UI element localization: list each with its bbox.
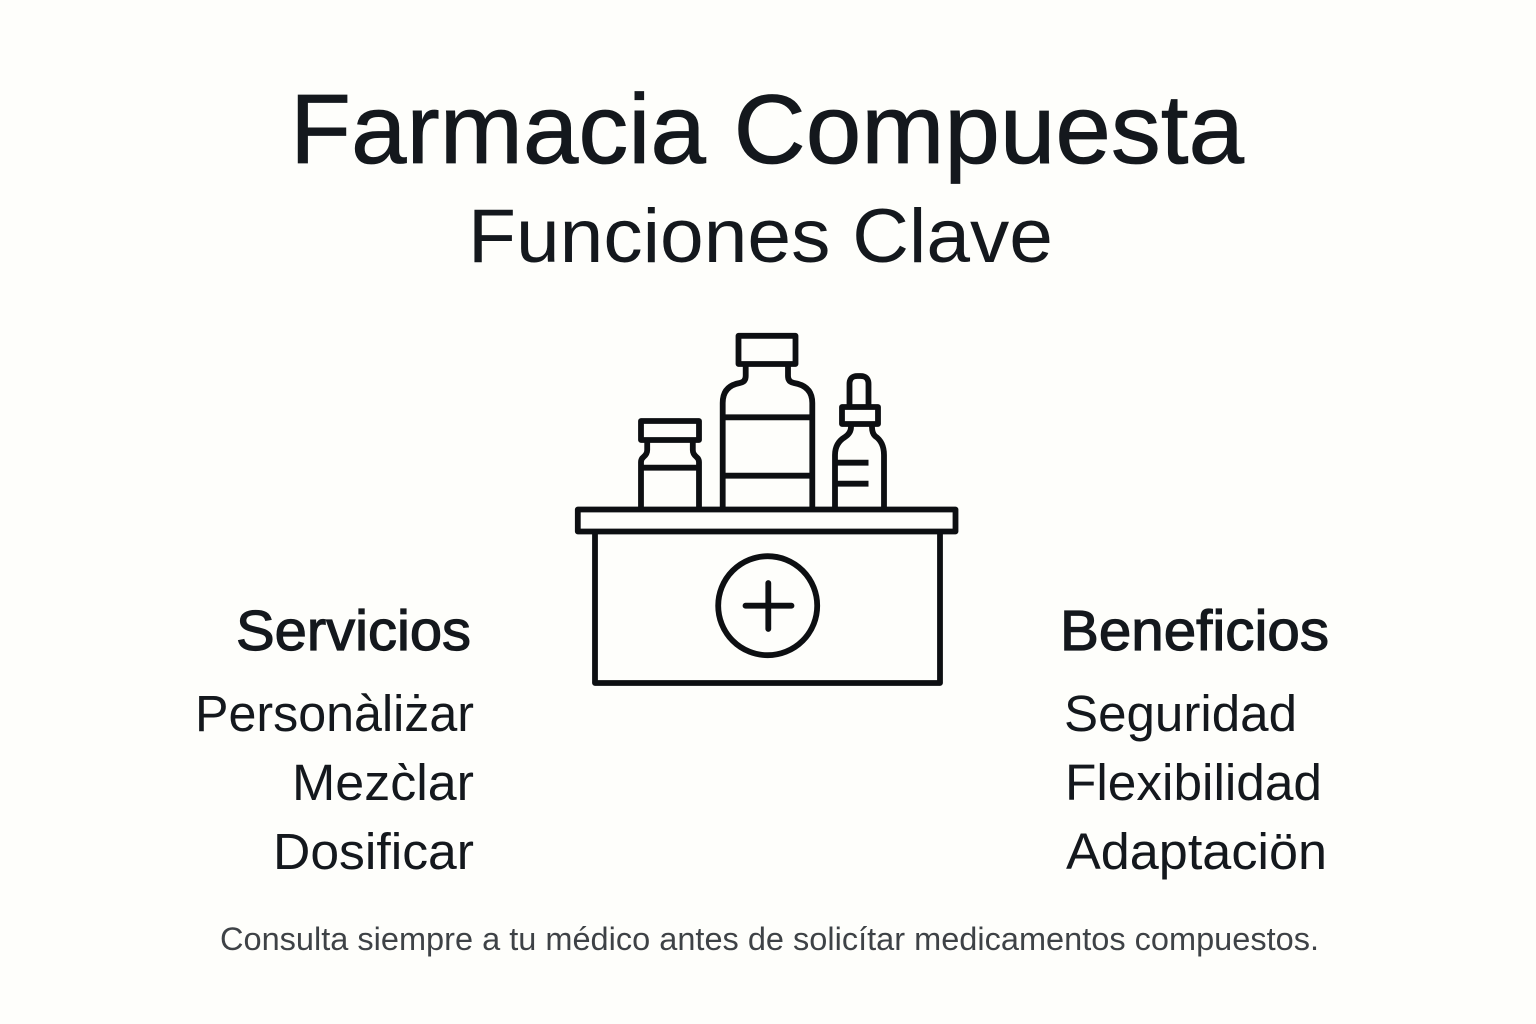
list: services: Personàliżar	[195, 685, 474, 742]
list: benefits: Flexibilidad	[1065, 754, 1322, 811]
icon: medicine box with bottles	[578, 336, 956, 683]
heading: benefits: Beneficios	[1060, 599, 1329, 663]
title: Farmacia Compuesta	[290, 74, 1244, 184]
icon: small jar	[641, 421, 699, 507]
list: benefits: Seguridad	[1064, 685, 1297, 742]
list: benefits: Adaptaciön	[1066, 823, 1327, 880]
icon: box lid	[578, 510, 956, 532]
icon: large bottle	[722, 336, 812, 507]
list: services: Mezc̀lar	[292, 754, 474, 811]
subtitle: Funciones Clave	[468, 194, 1053, 279]
list: benefits	[1064, 685, 1327, 880]
list: services: Dosificar	[273, 823, 474, 880]
icon: circled plus	[718, 556, 817, 655]
icon: dropper bottle	[835, 376, 884, 507]
list: services	[195, 685, 474, 880]
heading: services: Servicios	[236, 599, 471, 663]
footer note: Consulta siempre a tu médico antes de solicítar medicamentos compuestos.	[220, 921, 1319, 957]
icon: box body	[595, 532, 940, 683]
